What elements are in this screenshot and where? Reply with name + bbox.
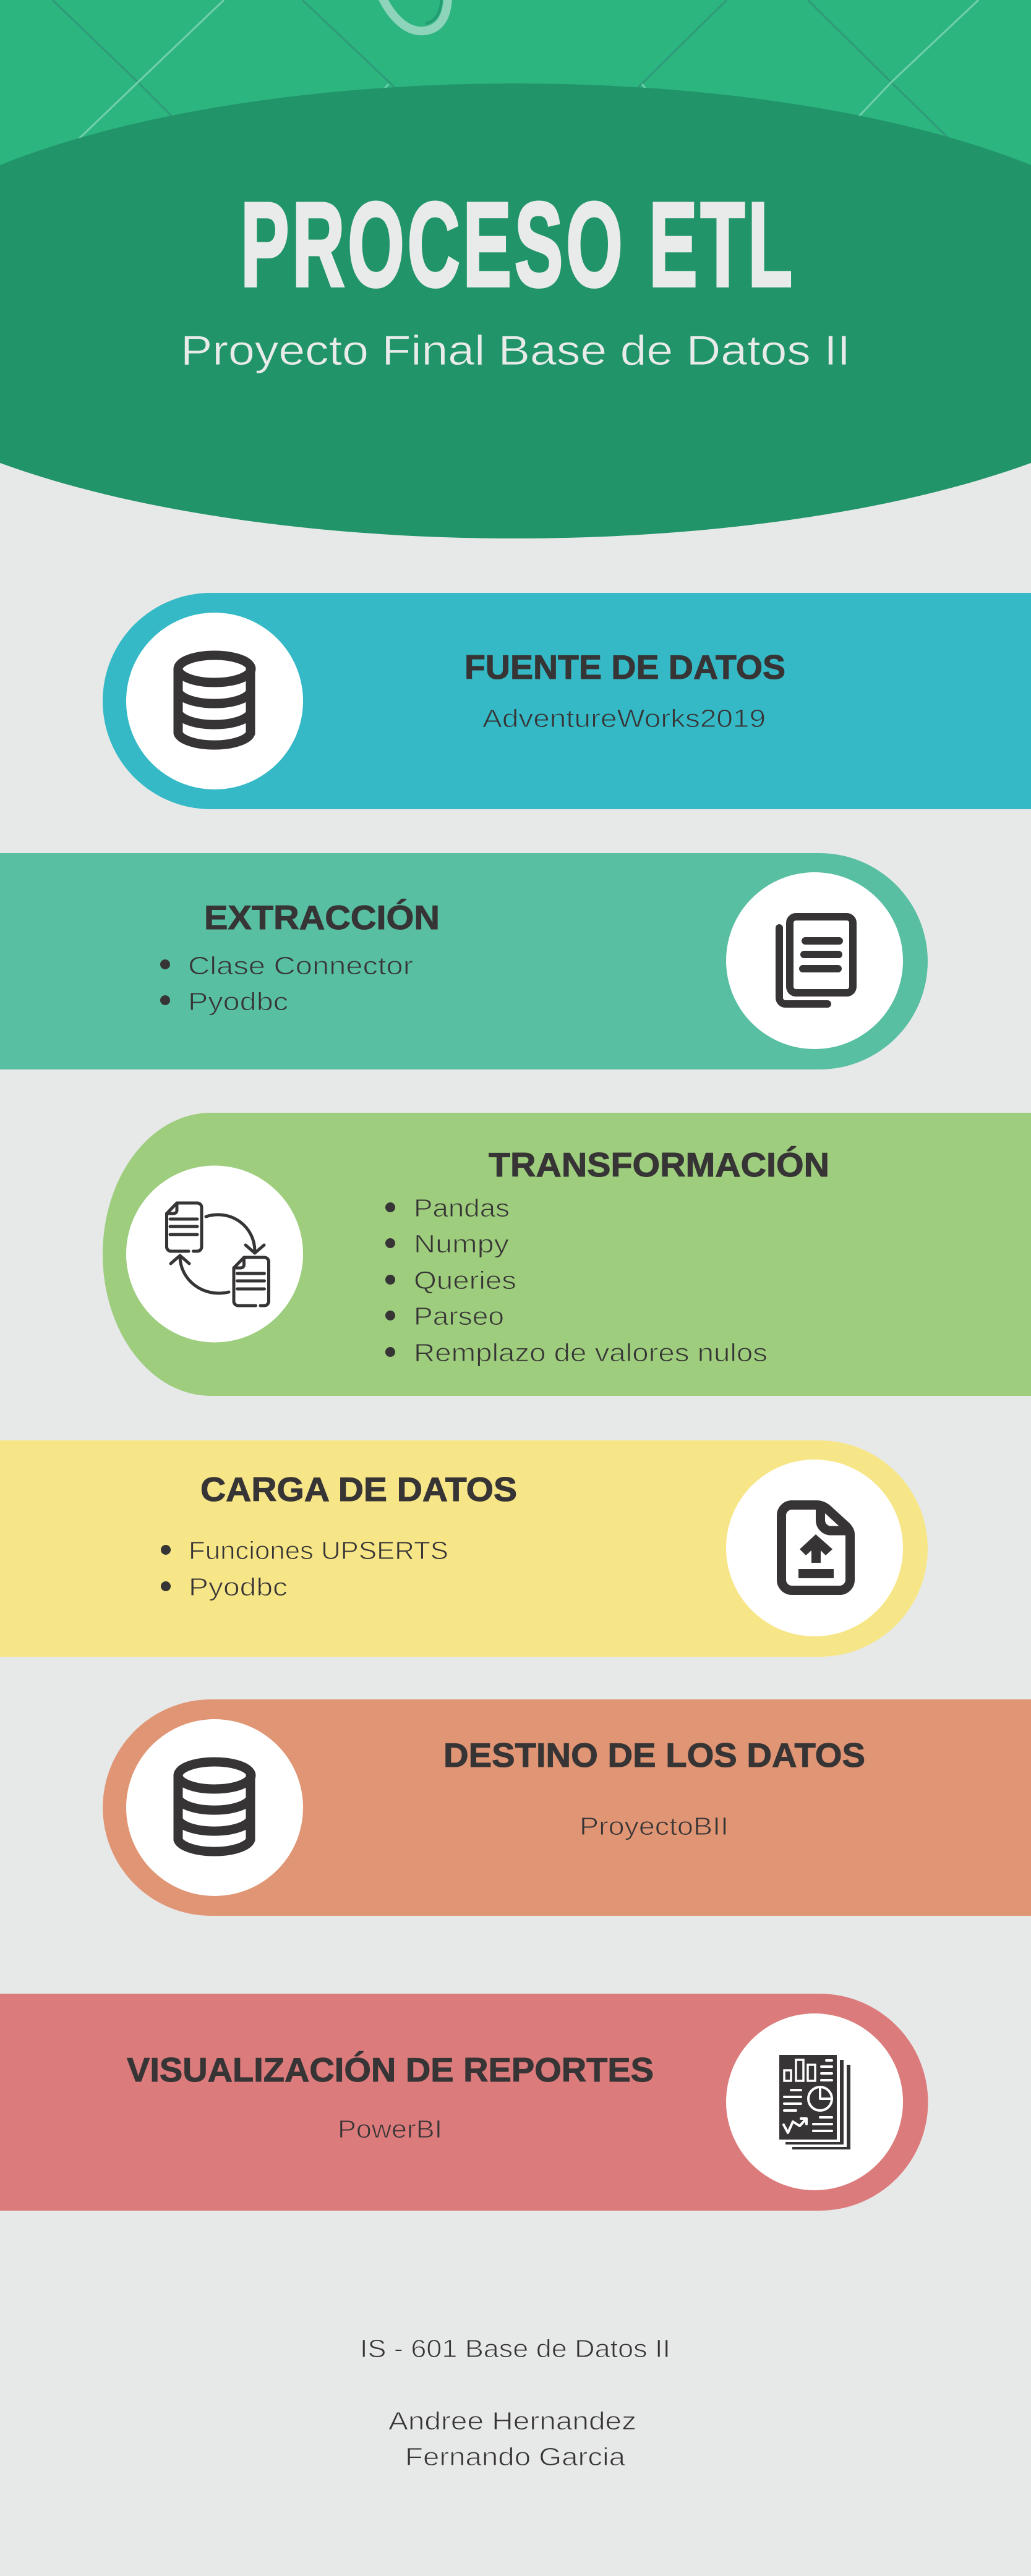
footer credits: Fernando Garcia bbox=[405, 2442, 625, 2471]
text: ProyectoBII bbox=[580, 1812, 729, 1840]
heading: VISUALIZACIÓN DE REPORTES bbox=[127, 2051, 654, 2089]
panel: visualizacion de reportes bbox=[0, 1994, 928, 2211]
bullet list bbox=[385, 1194, 768, 1367]
panel: fuente de datos bbox=[103, 593, 1031, 809]
panel: extraccion bbox=[0, 853, 928, 1069]
icon: database bbox=[126, 613, 303, 789]
heading: CARGA DE DATOS bbox=[200, 1470, 517, 1508]
bullet list bbox=[160, 951, 413, 1016]
heading: TRANSFORMACIÓN bbox=[489, 1146, 829, 1184]
icon: documents bbox=[726, 872, 903, 1049]
text: PowerBI bbox=[338, 2115, 442, 2143]
icon: document cycle bbox=[126, 1166, 303, 1343]
footer credits: Andree Hernandez bbox=[388, 2407, 636, 2435]
panel: destino de los datos bbox=[103, 1699, 1031, 1916]
header ellipse bbox=[0, 83, 1031, 538]
bullet list: Clase Connector bbox=[188, 951, 413, 980]
bullet list: Remplazo de valores nulos bbox=[414, 1338, 768, 1367]
bullet list: Funciones UPSERTS bbox=[189, 1536, 448, 1565]
text: AdventureWorks2019 bbox=[482, 704, 766, 733]
bullet list: Queries bbox=[414, 1266, 516, 1294]
decorative loop at top bbox=[381, 0, 448, 31]
subtitle: Proyecto Final Base de Datos II bbox=[181, 327, 850, 374]
footer credits: IS - 601 Base de Datos II bbox=[360, 2334, 670, 2363]
icon: report bbox=[726, 2013, 903, 2190]
bullet list: Pandas bbox=[414, 1194, 510, 1222]
heading: FUENTE DE DATOS bbox=[464, 648, 785, 686]
bullet list: Pyodbc bbox=[189, 1573, 288, 1601]
icon: database bbox=[126, 1719, 303, 1896]
bullet list: Pyodbc bbox=[188, 987, 288, 1016]
bullet list: Parseo bbox=[414, 1302, 504, 1330]
panel: transformacion bbox=[103, 1113, 1031, 1396]
panel: carga de datos bbox=[0, 1440, 928, 1657]
bullet list bbox=[161, 1536, 448, 1601]
bullet list: Numpy bbox=[414, 1230, 510, 1258]
heading: DESTINO DE LOS DATOS bbox=[443, 1736, 865, 1774]
header band with lattice pattern bbox=[0, 0, 1031, 284]
footer credits bbox=[360, 2334, 670, 2471]
icon: file upload bbox=[726, 1460, 903, 1636]
heading: EXTRACCIÓN bbox=[204, 898, 440, 937]
